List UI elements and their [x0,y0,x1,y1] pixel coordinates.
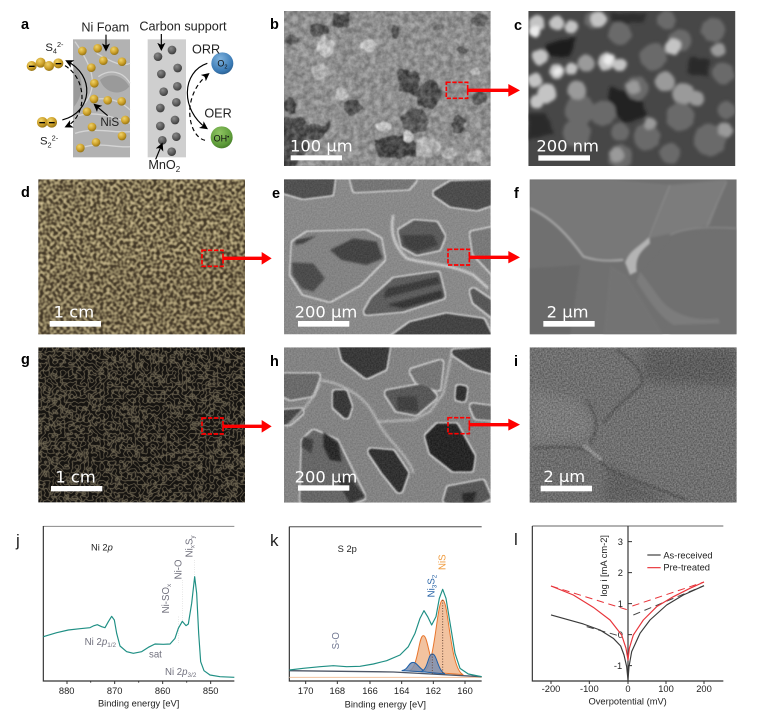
panel letter k: k [270,531,279,550]
schematic text labels: Ni Foam [81,21,129,35]
tick labels j: 870 [107,686,122,696]
red arrow b to c [467,84,520,97]
chart k: S 2p XPS [289,527,482,710]
tick labels l: -1 [614,661,622,671]
baselines k [289,671,482,677]
axis title y l: log i [mA cm-2] [599,535,609,597]
scale bar i [541,467,592,491]
panel f: SEM 2 um [530,179,737,334]
schematic text labels: 2- [57,40,64,49]
spectrum labels j: x [189,544,196,548]
panel letter h: h [270,354,279,370]
tick labels l [542,537,712,694]
panel letter g: g [21,352,30,368]
scale bar b: 100 µm [290,137,353,156]
peak guide lines k [432,600,443,675]
spectrum labels j: sat [149,650,162,661]
spectrum labels k: 3 [431,584,438,588]
scale bar g: 1 cm [55,467,96,486]
scale bar g [51,467,102,491]
blue fitted peaks [402,654,445,674]
axes j [43,526,234,684]
spectrum labels j: Ni 2p [91,543,113,553]
scale bar f: 2 µm [547,303,589,322]
scale bar e: 200 µm [295,303,357,322]
schematic text labels: MnO [148,158,176,172]
tick labels k: 168 [330,686,345,696]
spectrum labels k [331,544,448,649]
scale bar c: 200 nm [536,137,599,156]
panel letter f: f [514,186,519,202]
orange fitted peaks [408,600,463,675]
scale bar d: 1 cm [54,303,94,322]
panel letter b: b [270,17,279,33]
as-received curve [551,586,704,680]
spectrum labels k: S [426,578,437,585]
panel g: Ni foam photo pre-treated [38,347,272,502]
panel letter l: l [514,530,518,549]
tick labels l: 0 [625,684,631,694]
chart j: Ni 2p XPS [43,526,234,709]
S2 polysulfide [37,117,57,128]
red zoom box d [202,250,223,266]
OH sphere [211,126,233,148]
panel letter c: c [514,18,522,34]
red zoom box h [448,418,469,434]
spectrum labels k: S 2p [338,544,357,554]
OH sphere: OH [214,133,227,143]
red arrow h to i [469,419,520,431]
arrows: sulfur redox [62,61,87,127]
labelling arrows [95,34,162,159]
axis title x l: Overpotential (mV) [589,697,667,707]
panel a: schematic [27,20,233,174]
spectrum labels j: Ni-SO [161,587,172,613]
schematic text labels: OER [204,107,232,121]
OH sphere: • [227,135,229,141]
arrows: ORR and OER [187,63,208,140]
spectrum labels k: NiS [437,554,448,570]
pre-treated curve [551,582,704,660]
schematic text labels: S [40,136,48,148]
legend l: As-received [663,550,713,560]
red zoom box e [448,249,469,265]
spectrum labels j: x [166,583,173,587]
scale bar h: 200 µm [295,468,357,487]
panel d: Ni foam photo as received [38,179,272,334]
tick labels l: 100 [658,684,674,694]
tick labels l: 0 [618,630,623,640]
MnO2 particles [154,46,182,156]
red zoom box g [202,418,223,434]
axis title k: Binding energy [eV] [345,700,426,710]
tick labels j: 860 [155,686,170,696]
spectrum labels k: Ni [426,588,437,597]
schematic text labels: 2 [48,140,52,149]
spectrum j [43,577,234,677]
tick labels k: 160 [457,686,473,696]
spectrum labels k: 2 [431,574,438,578]
legend l [647,550,713,572]
panel letter a: a [21,17,30,33]
schematic text labels: S [45,42,53,54]
axes k [289,527,482,684]
scale bar d [50,303,101,327]
scale bar f [543,303,595,327]
chart l: Tafel [532,526,723,707]
spectrum labels k: S-O [331,632,342,649]
schematic text labels: 4 [53,47,57,56]
tick labels k: 166 [362,686,378,696]
peak guide lines j [179,560,195,643]
red arrow e to f [469,251,520,263]
tick labels j: 880 [59,686,74,696]
O2 sphere: 2 [224,64,227,70]
tick labels k: 164 [394,686,409,696]
spectrum labels j: S [184,539,195,545]
panel letter e: e [272,186,280,202]
spectrum labels j: Ni 2p [85,637,107,648]
spectrum labels j [85,535,197,679]
legend l: Pre-treated [663,562,710,572]
tick labels k: 170 [298,686,313,696]
panel c: SEM 200 nm [528,11,735,169]
tick labels l: 2 [618,568,623,578]
panel h: SEM 200 um [281,345,520,505]
spectrum labels j: Ni 2p [165,667,188,678]
scale bar i: 2 µm [543,467,585,486]
spectrum labels j: y [189,535,196,539]
axes l [532,526,723,684]
red zoom box b [446,82,468,98]
tick labels j [59,686,218,696]
tick labels k: 162 [426,686,441,696]
panel letter i: i [514,354,518,370]
panel letter d: d [21,185,30,201]
red arrow d to e [222,252,272,265]
S4 polysulfide chain [27,58,63,71]
spectrum labels j: Ni-O [174,559,185,579]
tick labels j: 850 [203,686,218,696]
tick labels l: 3 [618,537,623,547]
axis title j: Binding energy [eV] [98,699,179,709]
tick labels k [298,686,473,696]
schematic text labels: 2- [52,134,59,143]
NiS gold particles [76,44,130,152]
tick labels l: -200 [542,684,560,694]
schematic text labels: NiS [100,116,119,129]
schematic text labels [40,20,232,174]
O2 sphere [211,52,233,74]
dashed fits [551,582,704,635]
spectrum k [289,589,482,677]
tick labels l: 200 [696,684,712,694]
panel letter j: j [15,531,20,550]
schematic text labels: Carbon support [139,20,227,34]
carbon support block [148,39,186,157]
red arrow g to h [222,420,272,433]
spectrum labels j: 3/2 [188,672,197,679]
schematic text labels: 2 [176,165,181,174]
panel b: SEM 100 um [280,11,520,170]
schematic text labels: ORR [192,43,220,57]
tick labels l: -100 [580,684,599,694]
panel i: SEM 2 um [530,347,737,503]
Ni foam block [73,39,130,157]
tick labels l: 1 [618,599,623,609]
panel e: SEM 200 um [284,179,520,338]
spectrum labels j: 1/2 [107,642,117,649]
spectrum labels j: Ni [184,548,195,557]
O2 sphere: O [217,58,224,68]
